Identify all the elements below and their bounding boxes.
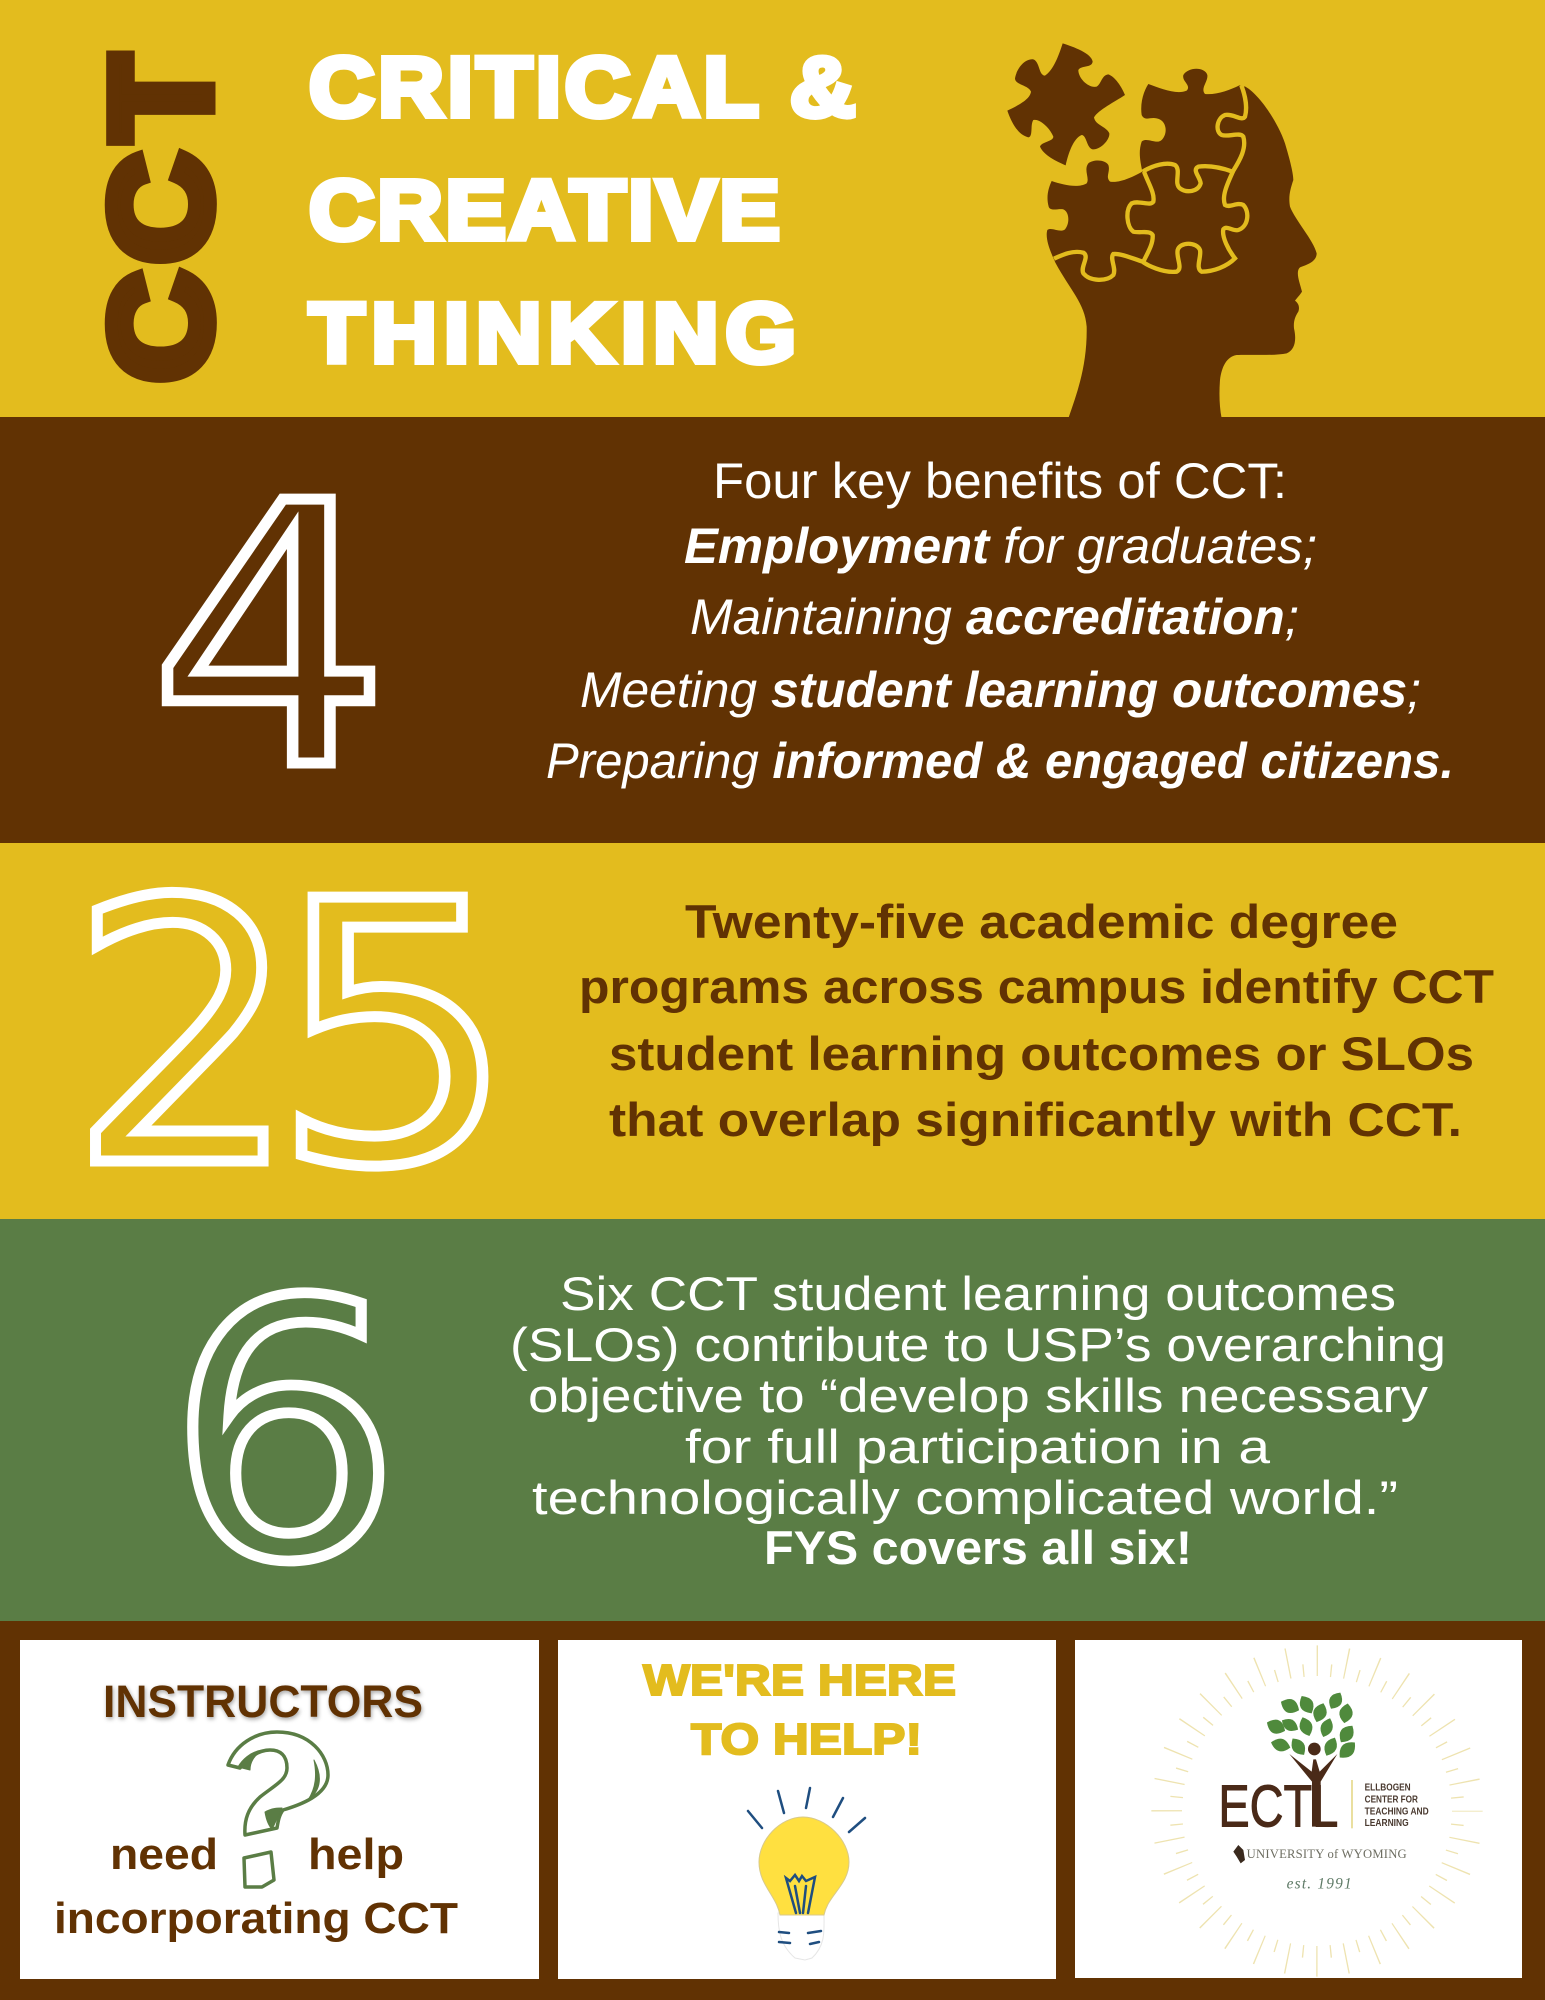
logo: ECTL bbox=[1167, 1661, 1467, 1961]
panel: here to help bbox=[558, 1640, 1056, 1979]
panel: instructors bbox=[20, 1640, 539, 1979]
center name: CENTER FOR bbox=[1365, 1794, 1418, 1805]
vertical label: CCT bbox=[82, 55, 240, 382]
benefits text bbox=[546, 453, 1454, 789]
text: need help incorporating CCT: incorporating CCT bbox=[54, 1894, 458, 1943]
text: need help incorporating CCT bbox=[54, 1830, 458, 1943]
center name bbox=[1365, 1782, 1429, 1829]
vertical label: CCT: T bbox=[82, 55, 239, 141]
sun rays bbox=[1167, 1661, 1467, 1961]
heading: we're here to help: TO HELP! bbox=[691, 1715, 922, 1764]
outcomes text: technologically complicated world.” bbox=[532, 1471, 1398, 1524]
text: need help incorporating CCT: need bbox=[110, 1830, 218, 1879]
outcomes text: objective to “develop skills necessary bbox=[528, 1369, 1429, 1422]
number 25: 5 bbox=[272, 825, 516, 1246]
title: CRITICAL & bbox=[309, 40, 855, 134]
panel: ECTL logo bbox=[1075, 1640, 1522, 1978]
number 25 bbox=[69, 825, 516, 1247]
heading: instructors: INSTRUCTORS bbox=[103, 1676, 423, 1727]
panel: six outcomes bbox=[0, 1219, 1545, 1640]
benefits text: Employment for graduates; bbox=[684, 518, 1317, 574]
programs text bbox=[579, 895, 1494, 1146]
established: est. 1991 bbox=[1287, 1875, 1352, 1892]
panel: four benefits bbox=[0, 417, 1545, 849]
panel: footer bbox=[0, 1621, 1545, 2000]
number 6: 6 bbox=[167, 1228, 402, 1640]
tree leaves bbox=[1264, 1689, 1360, 1762]
benefits text: Maintaining accreditation; bbox=[690, 589, 1299, 645]
heading: we're here to help bbox=[643, 1656, 956, 1764]
heading: we're here to help: WE'RE HERE bbox=[643, 1656, 956, 1705]
panel: twenty-five programs bbox=[0, 825, 1545, 1247]
center name: TEACHING AND bbox=[1365, 1806, 1429, 1817]
icon: question mark bbox=[228, 1732, 328, 1887]
benefits text: Preparing informed & engaged citizens. bbox=[546, 733, 1454, 789]
icon: head silhouette with puzzle pieces bbox=[1007, 43, 1317, 418]
center name: ELLBOGEN bbox=[1365, 1782, 1411, 1793]
number 4: 4 bbox=[149, 427, 391, 849]
benefits text: Four key benefits of CCT: bbox=[713, 453, 1287, 509]
figure bbox=[1289, 1743, 1337, 1827]
outcomes text: Six CCT student learning outcomes bbox=[560, 1267, 1396, 1320]
outcomes text: for full participation in a bbox=[685, 1420, 1271, 1473]
programs text: that overlap significantly with CCT. bbox=[609, 1093, 1462, 1146]
title: THINKING bbox=[309, 286, 796, 380]
panel: header bbox=[0, 0, 1545, 418]
icon: light bulb bbox=[748, 1788, 865, 1960]
text: need help incorporating CCT: help bbox=[308, 1830, 404, 1879]
center name: LEARNING bbox=[1365, 1818, 1409, 1829]
outcomes text bbox=[510, 1267, 1446, 1574]
programs text: student learning outcomes or SLOs bbox=[609, 1027, 1474, 1080]
title bbox=[309, 40, 855, 380]
number 25: 2 bbox=[69, 826, 299, 1247]
outcomes text: (SLOs) contribute to USP’s overarching bbox=[510, 1318, 1446, 1371]
ECTL lettering: ECTL bbox=[1218, 1773, 1338, 1840]
programs text: Twenty-five academic degree bbox=[685, 895, 1398, 948]
vertical label: CCT: CC bbox=[83, 153, 240, 382]
programs text: programs across campus identify CCT bbox=[579, 960, 1494, 1013]
outcomes text: FYS covers all six! bbox=[764, 1521, 1192, 1574]
title: CREATIVE bbox=[309, 163, 780, 257]
university of wyoming: UNIVERSITY of WYOMING bbox=[1247, 1847, 1407, 1861]
benefits text: Meeting student learning outcomes; bbox=[580, 662, 1421, 718]
